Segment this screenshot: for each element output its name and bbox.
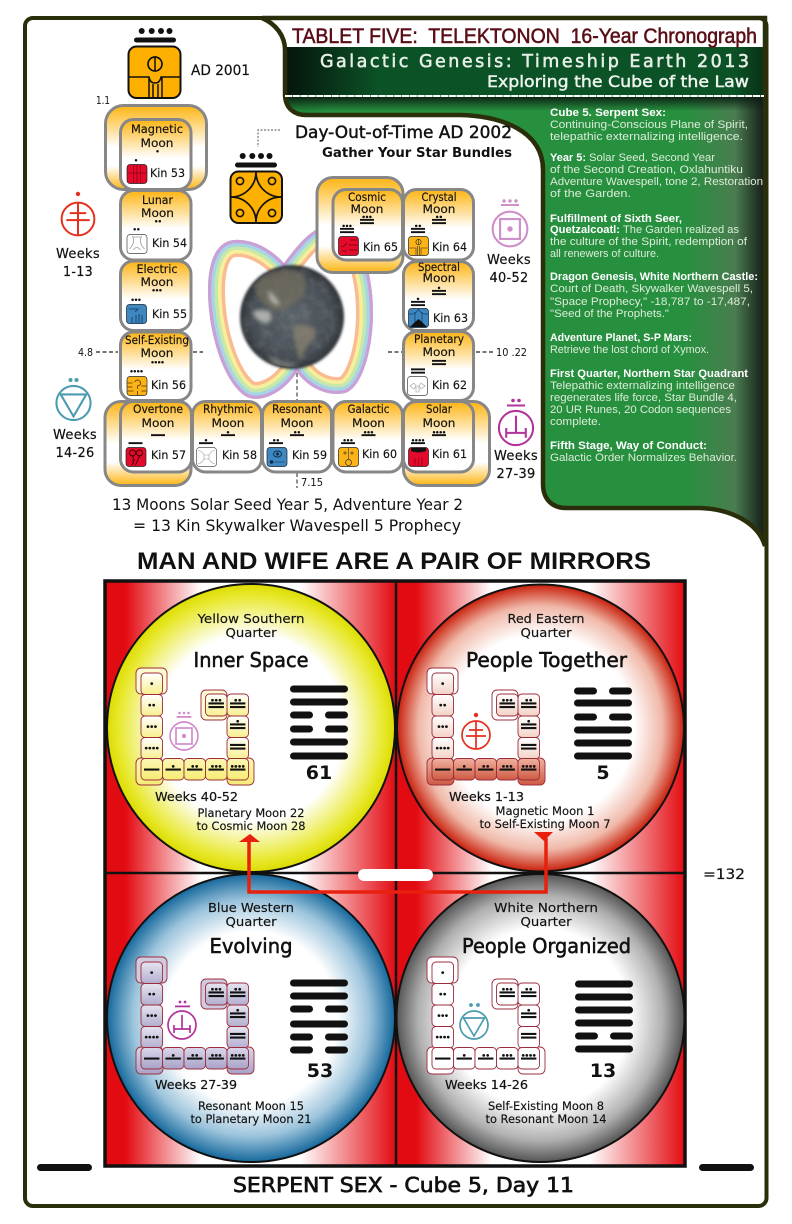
tile: Spectral Moon: Moon: [422, 271, 456, 285]
text block: cube notes: regenerates life force, Star Bundle 4,: [550, 392, 737, 404]
tile: Lunar Moon: Kin 54: [152, 236, 187, 250]
bar: left bottom: [37, 1164, 92, 1171]
heading: gather star bundles: Gather Your Star Bundles: [322, 145, 512, 161]
label: weeks 27-39: Weeks: [494, 448, 538, 464]
label: weeks 14-26: Weeks: [53, 427, 97, 443]
tile: Crystal Moon: Kin 64: [432, 240, 467, 254]
text block: cube notes: Telepathic externalizing intelligence: [550, 380, 735, 392]
frame: Magnetic outer: [106, 106, 206, 190]
quadrant: yellow southern: Planetary Moon 22: [198, 807, 304, 820]
quadrant: yellow southern: Weeks 40-52: [155, 790, 238, 804]
tile: Planetary Moon: Moon: [422, 345, 456, 359]
tile: Lunar Moon: Moon: [141, 206, 174, 220]
seal: Day-Out-of-Time: [230, 153, 282, 223]
icon: teal weeks 14-26: [56, 378, 91, 420]
label: weeks 14-26: 14-26: [56, 445, 94, 461]
text block: cube notes: Dragon Genesis, White Northern Castle:: [550, 271, 758, 283]
tile: Overtone Moon: Moon: [142, 416, 174, 430]
tile: Planetary Moon: [404, 332, 474, 400]
text block: cube notes: Year 5:: [550, 152, 586, 164]
label: weeks 1-13: Weeks: [56, 246, 100, 262]
tile: Cosmic Moon: Cosmic: [348, 190, 386, 204]
quadrant: yellow southern: Quarter: [226, 625, 277, 640]
text block: cube notes: 20 UR Runes, 20 Codon sequences: [550, 404, 731, 416]
text block: cube notes: [550, 107, 763, 464]
heading: man and wife: MAN AND WIFE ARE A PAIR OF MIRRORS: [137, 548, 651, 575]
quadrant: red eastern: 5: [596, 762, 610, 784]
tile: Rhythmic Moon: Rhythmic: [203, 402, 253, 416]
text block: cube notes: Solar Seed, Second Year: [589, 152, 715, 164]
quadrant: blue western: Weeks 27-39: [155, 1078, 237, 1092]
quadrant: blue western: Resonant Moon 15: [198, 1100, 304, 1113]
tile: Magnetic Moon: Kin 53: [150, 166, 185, 180]
quadrant: white northern: Quarter: [520, 914, 572, 929]
icon: lilac weeks 40-52: [493, 199, 527, 246]
tile: Solar Moon: Moon: [422, 416, 456, 430]
text block: cube notes: Galactic Order Normalizes Behavior.: [550, 452, 737, 464]
text block: cube notes: of the Garden.: [550, 188, 631, 200]
panel: mirror grid: [105, 581, 685, 1166]
text block: cube notes: of the Second Creation, Oxlahuntiku: [550, 164, 743, 176]
tile: Cosmic Moon: Kin 65: [363, 240, 398, 254]
label: weeks 27-39: [494, 448, 538, 482]
tile: Crystal Moon: Crystal: [422, 190, 456, 204]
tile: Solar Moon: Solar: [426, 402, 452, 416]
text block: cube notes: Retrieve the lost chord of Xymox.: [550, 344, 709, 356]
tile: Self-Existing Moon: Moon: [140, 346, 174, 360]
frame: Cosmic outer: [317, 178, 403, 272]
tile: Self-Existing Moon: Self-Existing: [125, 333, 189, 347]
tile: Spectral Moon: Kin 63: [433, 311, 468, 325]
tile: Electric Moon: [120, 261, 191, 330]
quadrant: red eastern: Red Eastern: [508, 611, 584, 626]
label: AD 2001: AD 2001: [191, 63, 250, 79]
connector: horizontal dashes left: [96, 351, 203, 353]
rainbow heart: [208, 226, 373, 399]
earth globe: [240, 265, 344, 369]
tile: Galactic Moon: Moon: [352, 416, 385, 430]
quadrant: white northern: 13: [590, 1060, 616, 1082]
quadrant: blue western: [107, 874, 395, 1162]
label: 1.1: 1.1: [96, 95, 110, 107]
quadrant: red eastern: [397, 584, 684, 872]
arrow: red connector: [239, 832, 553, 892]
heading: exploring the cube: Exploring the Cube of the Law: [487, 72, 749, 91]
label: 10.22: 10 .22: [496, 347, 527, 359]
label: weeks 40-52: 40-52: [490, 270, 528, 286]
tile: Lunar Moon: [120, 190, 191, 260]
text block: cube notes: telepathic externalizing intelligence.: [550, 131, 743, 143]
connector: horizontal dashes right: [388, 351, 495, 353]
text block: cube notes: Court of Death, Skywalker Wavespell 5,: [550, 283, 753, 295]
text block: cube notes: "Space Prophecy," -18,787 to -17,487,: [550, 296, 750, 308]
text block: cube notes: First Quarter, Northern Star Quadrant: [550, 368, 748, 380]
label: weeks 40-52: Weeks: [487, 252, 531, 268]
tile: Galactic Moon: [333, 402, 402, 472]
quadrant: white northern: Self-Existing Moon 8: [488, 1100, 604, 1113]
title: tablet five: TABLET FIVE: TELEKTONON 16-Year Chronograph: [292, 25, 757, 48]
text block: cube notes: Fulfillment of Sixth Seer,: [550, 213, 682, 225]
tile: Cosmic Moon: [333, 190, 402, 260]
quadrant: white northern: Weeks 14-26: [445, 1078, 528, 1092]
label: weeks 27-39: 27-39: [496, 466, 536, 482]
text block: cube notes: Continuing-Conscious Plane of Spirit,: [550, 119, 748, 131]
label: weeks 1-13: 1-13: [63, 264, 93, 280]
tile: Resonant Moon: Kin 59: [292, 448, 327, 462]
tile: Solar Moon: Kin 61: [432, 447, 467, 461]
tile: Resonant Moon: Moon: [280, 416, 314, 430]
caption: 13 moons: 13 Moons Solar Seed Year 5, Adventure Year 2: [112, 495, 463, 514]
panel: header and green notes banner: [255, 15, 770, 546]
tile: Magnetic Moon: Moon: [140, 136, 174, 150]
heading: Day-Out-of-Time: Day-Out-of-Time AD 2002: [295, 123, 512, 142]
text block: cube notes: "Seed of the Prophets.": [550, 308, 669, 320]
text block: cube notes: all renewers of culture.: [550, 248, 659, 260]
quadrant: white northern: White Northern: [494, 900, 598, 915]
tile: Overtone Moon: Kin 57: [151, 448, 186, 462]
quadrant: yellow southern: [107, 584, 395, 872]
quadrant: red eastern: People Together: [466, 648, 628, 672]
tile: Overtone Moon: [120, 402, 192, 472]
tile: Planetary Moon: Kin 62: [432, 378, 467, 392]
frame: Overtone outer: [105, 402, 191, 486]
quadrant: blue western: 53: [307, 1060, 333, 1082]
tile: Lunar Moon: Lunar: [142, 193, 173, 207]
icon: red weeks 1-13: [62, 192, 94, 235]
tile: Rhythmic Moon: Kin 58: [222, 448, 257, 462]
quadrant: red eastern: to Self-Existing Moon 7: [480, 818, 610, 831]
quadrant: yellow southern: 61: [306, 762, 332, 784]
tile: Crystal Moon: [404, 190, 474, 260]
tile: Solar Moon: [404, 402, 474, 472]
text block: cube notes: Fifth Stage, Way of Conduct:: [550, 440, 707, 452]
text block: cube notes: Adventure Planet, S-P Mars:: [550, 332, 692, 344]
label: weeks 14-26: [53, 427, 97, 461]
quadrant: blue western: Blue Western: [208, 900, 294, 915]
bar: right bottom: [699, 1164, 754, 1171]
text block: cube notes: the culture of the Spirit, redemption of: [550, 236, 748, 248]
tile: Electric Moon: Moon: [140, 275, 174, 289]
tile: Magnetic Moon: [120, 120, 191, 190]
label: 4.8: 4.8: [78, 347, 93, 359]
pill: white center marker: [358, 869, 433, 881]
caption: 13 moons: [112, 495, 463, 535]
tile: Cosmic Moon: Moon: [350, 202, 384, 216]
label: 7.15: 7.15: [301, 477, 323, 489]
tile: Crystal Moon: Moon: [422, 202, 456, 216]
frame: Solar outer: [404, 402, 490, 486]
tile: Spectral Moon: [404, 260, 474, 330]
quadrant: red eastern: Quarter: [520, 625, 572, 640]
tile: Electric Moon: Kin 55: [152, 307, 187, 321]
quadrant: white northern: to Resonant Moon 14: [486, 1113, 606, 1126]
text block: cube notes: Cube 5. Serpent Sex:: [550, 107, 666, 119]
text block: cube notes: Quetzalcoatl:: [550, 224, 620, 236]
label: weeks 40-52: [487, 252, 531, 286]
footer title: SERPENT SEX - Cube 5, Day 11: [233, 1173, 574, 1197]
label: weeks 1-13: [56, 246, 100, 280]
quadrant: blue western: to Planetary Moon 21: [190, 1113, 312, 1126]
quadrant: yellow southern: to Cosmic Moon 28: [196, 820, 306, 833]
quadrant: blue western: Quarter: [226, 914, 277, 929]
seal: AD 2001: [128, 28, 180, 98]
quadrant: yellow southern: Yellow Southern: [196, 611, 304, 626]
tile: Galactic Moon: Galactic: [348, 402, 390, 416]
text block: cube notes: Adventure Wavespell, tone 2, Restoration: [550, 176, 763, 188]
tile: Planetary Moon: Planetary: [414, 332, 464, 346]
tile: Electric Moon: Electric: [136, 262, 178, 276]
quadrant: white northern: People Organized: [462, 934, 631, 958]
tile: Resonant Moon: [262, 402, 332, 472]
text block: cube notes: complete.: [550, 416, 601, 428]
connector: dotted leader: [258, 130, 280, 147]
tile: Self-Existing Moon: Kin 56: [151, 378, 186, 392]
quadrant: yellow southern: Inner Space: [194, 648, 308, 672]
caption: 13 moons: = 13 Kin Skywalker Wavespell 5 Prophecy: [133, 516, 461, 535]
tile: Galactic Moon: Kin 60: [362, 447, 397, 461]
connector: vertical dashed: [296, 373, 298, 488]
quadrant: red eastern: Weeks 1-13: [449, 790, 524, 804]
tile: Spectral Moon: Spectral: [418, 260, 460, 274]
tile: Overtone Moon: Overtone: [133, 402, 183, 416]
label: =132: =132: [703, 867, 745, 883]
quadrant: blue western: Evolving: [210, 934, 292, 958]
icon: magenta weeks 27-39: [499, 399, 533, 445]
quadrant: white northern: [396, 874, 684, 1162]
text block: cube notes: The Garden realized as: [623, 224, 739, 236]
tile: Resonant Moon: Resonant: [272, 402, 322, 416]
heading: galactic genesis: Galactic Genesis: Timeship Earth 2013: [320, 52, 749, 72]
tile: Self-Existing Moon: [120, 332, 191, 400]
tile: Rhythmic Moon: [192, 402, 262, 472]
tile: Magnetic Moon: Magnetic: [131, 122, 183, 136]
quadrant: red eastern: Magnetic Moon 1: [496, 805, 594, 818]
tile: Rhythmic Moon: Moon: [212, 416, 244, 430]
